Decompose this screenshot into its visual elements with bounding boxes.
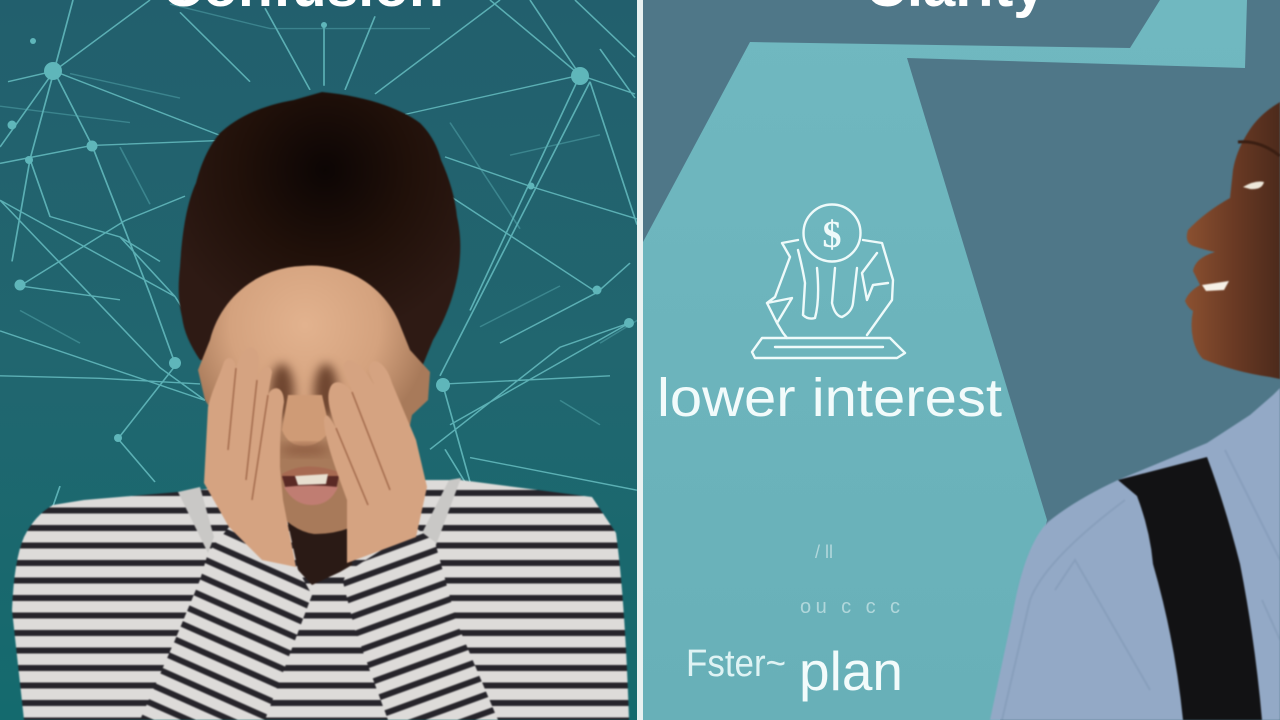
right hand (324, 360, 427, 563)
panel: confusion (0, 0, 640, 720)
hair (179, 92, 460, 367)
thumb side (862, 240, 893, 335)
panel: clarity (643, 0, 1280, 720)
smile (1202, 281, 1229, 291)
upper lip (282, 466, 338, 476)
collar (178, 478, 461, 553)
faint marks: / ll (815, 542, 833, 562)
forearm right (343, 528, 498, 720)
brow (1238, 142, 1280, 156)
shirt (990, 388, 1280, 720)
under-nose shadow (281, 445, 329, 455)
shirt folds (1002, 450, 1280, 720)
tangled network lines (0, 0, 640, 515)
nose (282, 395, 330, 446)
teeth (295, 474, 328, 485)
dollar sign: $ (822, 214, 842, 256)
neck and head (1185, 102, 1280, 400)
mouth (282, 476, 339, 490)
lower lip (284, 486, 338, 505)
faint characters: ou c c c (800, 596, 900, 618)
stand (752, 338, 905, 358)
garbled label: Fster~ (686, 643, 786, 685)
man looking up (990, 102, 1280, 720)
panel background (643, 0, 1280, 720)
sweater body (12, 480, 629, 720)
left hand (204, 347, 296, 567)
fingers (798, 250, 857, 319)
eye (1243, 182, 1264, 189)
woman covering her eyes (12, 92, 629, 720)
neck shadow (285, 510, 352, 585)
panel background (0, 0, 637, 720)
network nodes (8, 22, 634, 442)
label: plan: plan (799, 640, 903, 702)
eye shadows (270, 364, 338, 420)
coin (804, 204, 860, 262)
left finger and down arrow (767, 240, 798, 338)
backpack strap (1118, 457, 1262, 720)
center divider (637, 0, 643, 720)
face (198, 266, 430, 534)
forearm left (140, 527, 312, 720)
label: lower interest: lower interest (657, 368, 1002, 428)
icon: dollar coin over hand (752, 204, 905, 358)
finger creases (228, 368, 390, 505)
light teal beam (643, 0, 1247, 720)
